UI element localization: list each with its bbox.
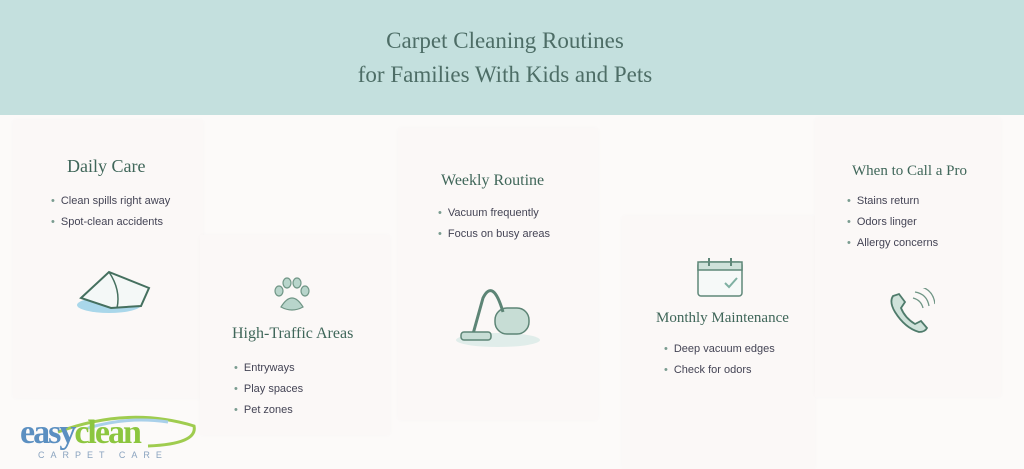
list: monthly <box>664 343 775 376</box>
icon: phone <box>890 288 935 333</box>
list: high-traffic: Pet zones <box>244 404 293 416</box>
logo: easy clean carpet care: CARPET CARE <box>38 450 168 460</box>
list: daily care <box>52 195 170 228</box>
panel: when to call a pro <box>815 118 1001 397</box>
icon: calendar <box>697 258 743 297</box>
panel: monthly maintenance <box>622 216 815 469</box>
title: for Families With Kids and Pets <box>358 62 652 87</box>
heading: pro: When to Call a Pro <box>852 163 967 179</box>
list: monthly: Deep vacuum edges <box>674 343 775 355</box>
heading: monthly: Monthly Maintenance <box>656 310 789 326</box>
heading: daily care: Daily Care <box>67 156 145 176</box>
title <box>358 28 652 87</box>
list: high-traffic: Entryways <box>244 362 295 374</box>
list: daily care: Clean spills right away <box>61 195 170 207</box>
panel: high-traffic areas <box>200 235 390 435</box>
list: weekly: Vacuum frequently <box>448 207 539 219</box>
list: weekly <box>438 207 550 240</box>
heading: weekly: Weekly Routine <box>441 172 544 189</box>
icon: cloth and spill <box>77 270 150 313</box>
title: Carpet Cleaning Routines <box>386 28 624 53</box>
header band <box>0 0 1024 115</box>
list: high-traffic <box>234 362 303 416</box>
list: pro: Odors linger <box>857 216 917 228</box>
list: pro <box>848 195 938 249</box>
list: high-traffic: Play spaces <box>244 383 303 395</box>
logo: easy clean carpet care <box>20 414 196 460</box>
icon: paw <box>274 277 310 311</box>
panel: weekly routine <box>398 128 598 420</box>
panel: daily care <box>13 120 203 398</box>
list: daily care: Spot-clean accidents <box>61 216 163 228</box>
logo: easy clean carpet care: easyclean <box>20 414 140 451</box>
icon: vacuum <box>456 289 540 347</box>
list: pro: Stains return <box>857 195 919 207</box>
list: monthly: Check for odors <box>674 364 752 376</box>
list: pro: Allergy concerns <box>857 237 938 249</box>
heading: high-traffic: High-Traffic Areas <box>232 325 353 342</box>
list: weekly: Focus on busy areas <box>448 228 550 240</box>
